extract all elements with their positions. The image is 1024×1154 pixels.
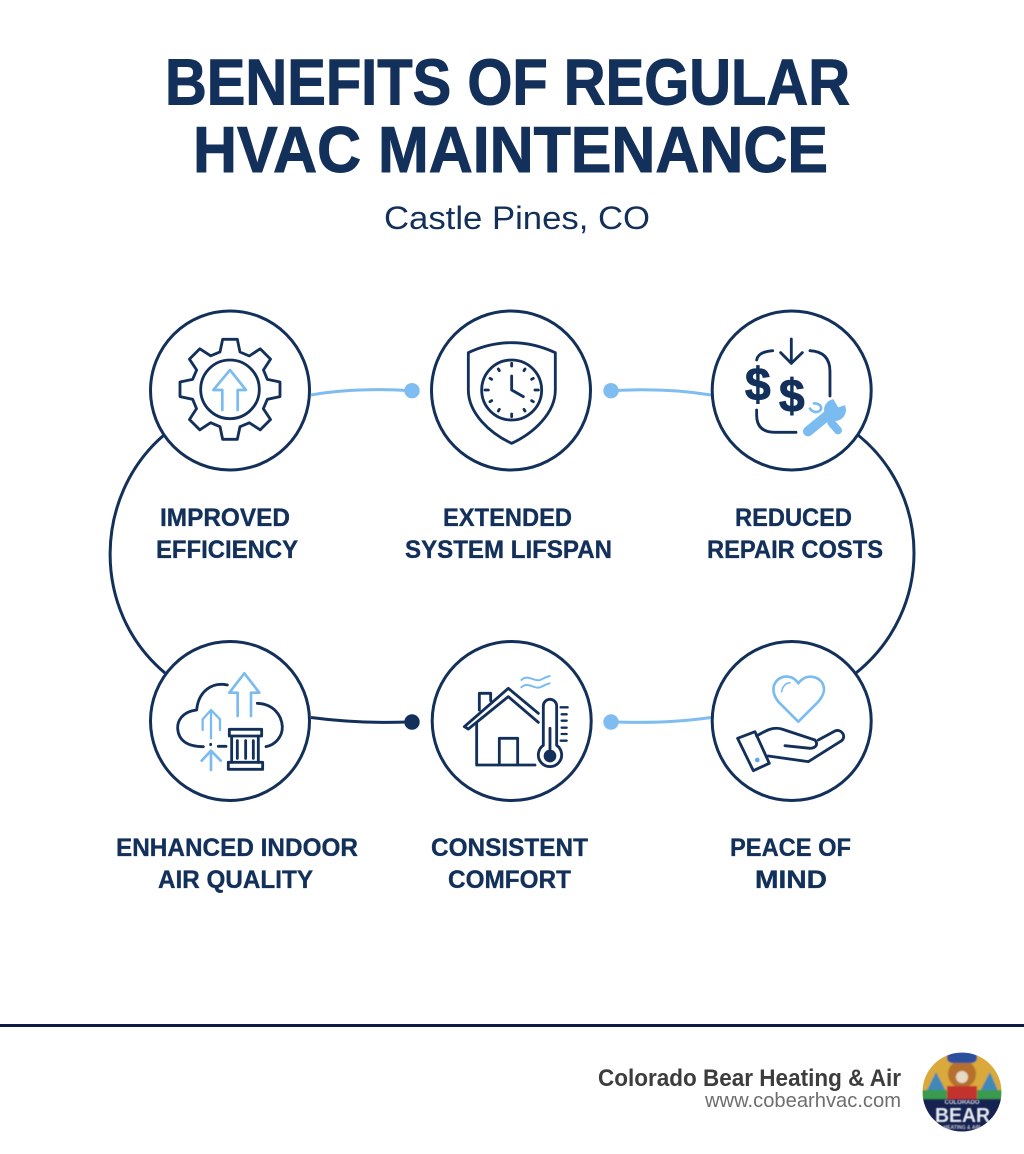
label: EFFICIENCY [156, 536, 298, 564]
connector: efficiency to lifespan [311, 383, 420, 398]
title: HVAC MAINTENANCE [193, 113, 828, 186]
label [730, 834, 851, 894]
icon: dollars and wrench [745, 339, 848, 432]
label: REDUCED [735, 504, 852, 532]
panel: improved efficiency [150, 311, 310, 564]
icon: cloud, air filter and arrows [178, 673, 282, 770]
title [165, 46, 850, 186]
footer brand text: Colorado Bear Heating & Air [598, 1065, 901, 1092]
icon circle: gear [150, 311, 310, 470]
connector: comfort to peace of mind [603, 714, 711, 730]
logo: Colorado Bear badge: COLORADO [944, 1100, 980, 1106]
label: EXTENDED [443, 504, 572, 532]
footer divider [0, 1024, 1024, 1027]
logo: Colorado Bear badge [922, 1052, 1002, 1134]
icon: hand holding heart [738, 677, 844, 771]
connector: air quality to comfort [311, 714, 420, 730]
title: BENEFITS OF REGULAR [165, 46, 850, 118]
panel: extended system lifespan [405, 311, 612, 564]
label: CONSISTENT [431, 834, 588, 862]
footer brand text [598, 1065, 901, 1112]
label: PEACE OF [730, 834, 851, 862]
label [116, 834, 358, 894]
icon: dollars and wrench: $ [779, 369, 805, 421]
panel: peace of mind [712, 642, 871, 894]
label [707, 504, 883, 564]
subtitle: Castle Pines, CO [384, 200, 650, 236]
connector: lifespan to repair costs [603, 383, 711, 398]
logo: Colorado Bear badge: BEAR [935, 1105, 991, 1127]
label: ENHANCED INDOOR [116, 834, 358, 862]
right loop arc connector [856, 435, 914, 673]
icon circle: cloud and filter [150, 642, 310, 800]
panel: consistent comfort [431, 642, 591, 894]
icon: gear with up arrow [180, 339, 280, 439]
icon: shield with clock [468, 343, 555, 443]
left loop arc connector [110, 435, 165, 673]
footer brand text: www.cobearhvac.com [704, 1090, 901, 1112]
icon: house with thermometer [464, 676, 568, 767]
logo: Colorado Bear badge: HEATING & AIR [944, 1125, 981, 1131]
icon circle: shield [432, 311, 590, 470]
label: SYSTEM LIFSPAN [405, 536, 612, 564]
panel: reduced repair costs [707, 311, 883, 564]
label: COMFORT [448, 866, 571, 894]
label: REPAIR COSTS [707, 536, 883, 564]
icon circle: dollars and wrench [712, 311, 871, 470]
icon circle: hand and heart [712, 642, 871, 800]
label: IMPROVED [160, 504, 290, 532]
label [431, 834, 588, 894]
panel: enhanced indoor air quality [116, 642, 358, 894]
label: AIR QUALITY [158, 866, 313, 894]
label [156, 504, 298, 564]
label [405, 504, 612, 564]
icon circle: house and thermometer [432, 642, 591, 800]
label: MIND [755, 866, 827, 894]
icon: dollars and wrench: $ [745, 358, 771, 410]
